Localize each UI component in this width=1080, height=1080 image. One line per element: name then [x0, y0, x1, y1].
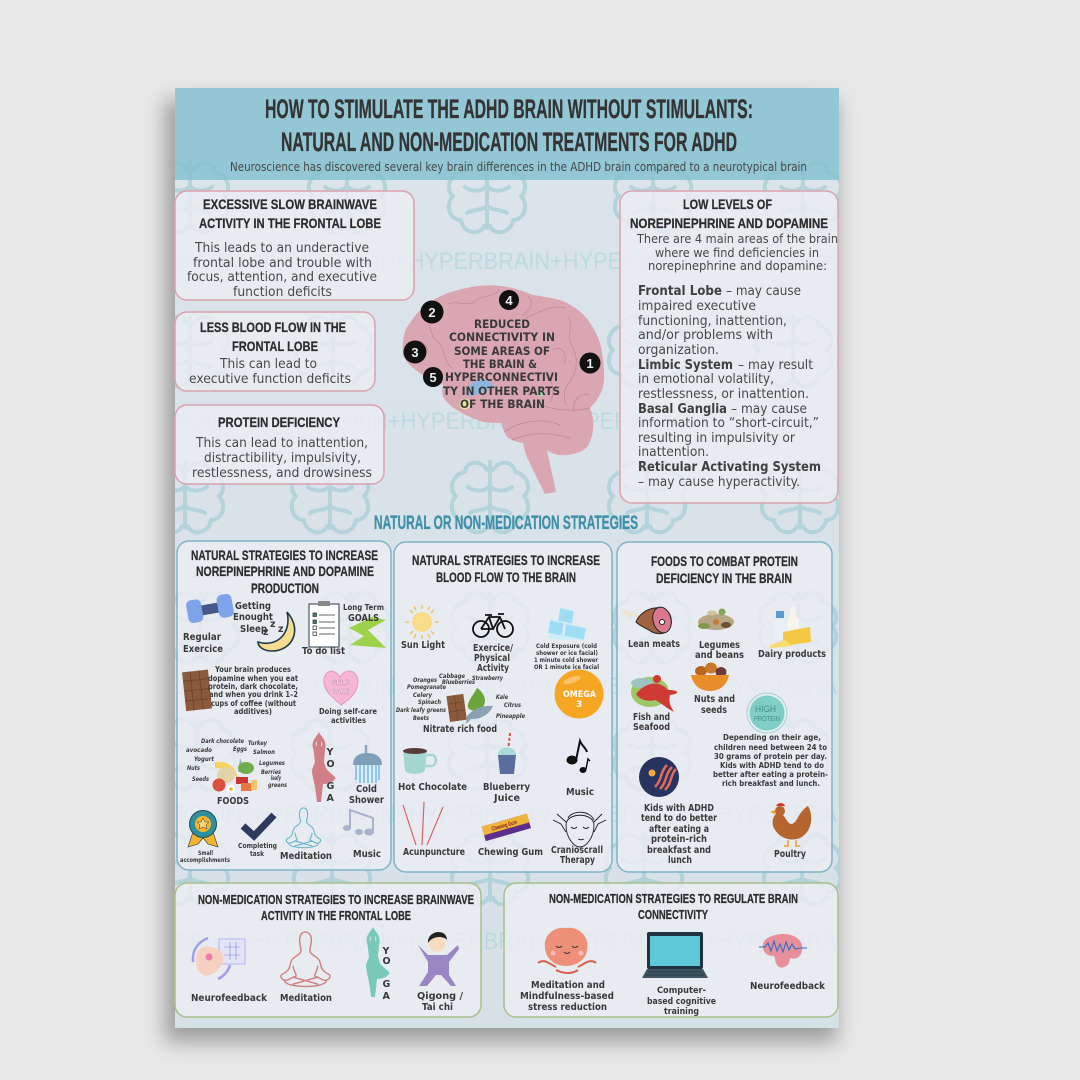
icon: omega 3 capsule: 3 — [576, 700, 582, 710]
food words: Dark chocolate — [201, 738, 244, 745]
text: dopamine note: dopamine when you eat — [208, 674, 298, 683]
brain markers 1-5: 4 — [505, 293, 513, 308]
label: hot chocolate: Hot Chocolate — [398, 782, 467, 793]
icon: green goals mountain — [349, 617, 386, 648]
label: nuts and seeds: seeds — [701, 705, 727, 716]
label: cold shower — [349, 784, 384, 806]
label: blueberry juice: Blueberry — [483, 782, 531, 793]
text: protein note: children need between 24 to — [714, 743, 828, 752]
panel: low levels of norepinephrine and dopamine: Frontal Lobe — [638, 283, 722, 299]
text: dopamine note: and when you drink 1–2 — [209, 690, 298, 699]
nitrate food words: Oranges — [413, 677, 437, 684]
panel: strategies to increase norepinephrine and dopamine: PRODUCTION — [251, 580, 319, 596]
nitrate food words: Blueberries — [442, 679, 475, 686]
label: neurofeedback: Neurofeedback — [750, 981, 826, 992]
label: completing task — [238, 842, 277, 858]
panel: strategies to increase norepinephrine and dopamine: NATURAL STRATEGIES TO INCREASE — [191, 547, 378, 563]
brain centre text: THE BRAIN & — [463, 357, 537, 371]
food words: Eggs — [233, 746, 247, 753]
icon: ham — [624, 605, 674, 635]
food words: avocado — [186, 747, 212, 754]
panel: low levels of norepinephrine and dopamine: NOREPINEPHRINE AND DOPAMINE — [630, 215, 828, 231]
brain centre text: SOME AREAS OF — [454, 344, 550, 358]
label: yoga letters: Y — [382, 946, 390, 957]
text: dopamine note: additives) — [234, 707, 272, 716]
panel: excessive slow brainwave activity: This leads to an underactive — [194, 240, 369, 256]
label: computer-based cognitive training: Computer- — [657, 986, 706, 996]
icon: nuts bowl — [691, 662, 729, 691]
label: neurofeedback: Neurofeedback — [191, 993, 268, 1004]
label: computer-based cognitive training: training — [664, 1007, 699, 1017]
food words: Nuts — [187, 765, 200, 772]
label: legumes and beans: Legumes — [699, 640, 740, 651]
label: small accomplishments — [180, 850, 230, 864]
panel: protein deficiency — [175, 405, 384, 484]
panel: foods to combat protein deficiency: DEFICIENCY IN THE BRAIN — [656, 570, 792, 586]
watermark wordmark rows — [384, 252, 837, 949]
label: legumes and beans: and beans — [695, 650, 744, 661]
watermark wordmark rows: BRAIN+HYPERBRAIN+HYPERBRAIN+HYPERBRAIN+HYPERBRA — [175, 801, 837, 828]
label: computer-based cognitive training: based cognitive — [647, 997, 716, 1007]
panel: low levels of norepinephrine and dopamine: where we find deficiencies in — [655, 245, 819, 260]
panel: less blood flow — [175, 312, 375, 391]
label: yoga letters: A — [382, 991, 390, 1002]
icon: acupuncture needles — [403, 802, 443, 845]
panel: low levels of norepinephrine and dopamine: resulting in impulsivity or — [638, 430, 795, 446]
label: cranioscrall therapy — [551, 845, 603, 866]
panel: strategies to regulate brain connectivity — [504, 883, 838, 1017]
brain centre text: HYPERCONNECTIVI — [445, 370, 558, 384]
label: doing self-care activities: Doing self-care — [319, 707, 377, 716]
label: qigong tai chi — [417, 991, 464, 1013]
panel: low levels of norepinephrine and dopamine: – may cause — [731, 401, 807, 417]
label: cold shower: Cold — [356, 784, 377, 795]
nitrate food words: Strawberry — [472, 675, 504, 682]
label: meditation: Meditation — [280, 851, 332, 862]
watermark wordmark rows: BRAIN+HYPERBRAIN+HYPERBRAIN+HYPERBRAIN+HYPERBRA — [175, 928, 837, 955]
nitrate food words — [396, 673, 525, 722]
panel: less blood flow: LESS BLOOD FLOW IN THE — [200, 319, 346, 335]
icon: dairy products — [770, 607, 811, 648]
panel: low levels of norepinephrine and dopamine: Reticular Activating System — [638, 459, 821, 475]
icon: nitrate foods — [446, 688, 493, 724]
label: getting enought sleep: Getting — [235, 601, 271, 612]
label: long term goals: GOALS — [348, 613, 379, 624]
nitrate food words: Beets — [413, 715, 429, 722]
icon: omega 3 capsule: OMEGA — [563, 690, 596, 700]
text: cold exposure: Cold Exposure (cold — [536, 643, 597, 650]
panel: low levels of norepinephrine and dopamine: impaired executive — [638, 298, 756, 314]
panel: protein deficiency: PROTEIN DEFICIENCY — [218, 414, 341, 430]
icon: laptop — [642, 932, 708, 978]
label: cranioscrall therapy: Cranioscrall — [551, 845, 603, 856]
watermark wordmark rows: BRAIN+HYPERBRAIN+HYPERBRAIN+HYPERBRAIN+HYPERBRA — [175, 248, 837, 275]
text: kids with adhd: lunch — [668, 855, 692, 866]
label: to do list: To do list — [302, 646, 345, 657]
subtitle: Neuroscience has discovered several key brain differences in the ADHD brain compared to a neurotypical brain — [230, 159, 807, 174]
label: fish and seafood — [633, 712, 670, 733]
panel: excessive slow brainwave activity: ACTIVITY IN THE FRONTAL LOBE — [199, 215, 381, 231]
panel: strategies to increase blood flow: NATURAL STRATEGIES TO INCREASE — [412, 552, 600, 568]
panel: low levels of norepinephrine and dopamine: – may cause hyperactivity. — [638, 474, 800, 490]
brain centre text: REDUCED — [474, 317, 530, 331]
label: regular exercice: Exercice — [183, 644, 223, 655]
label: regular exercice — [183, 632, 223, 655]
brain markers 1-5: 5 — [429, 370, 437, 385]
panel: strategies to increase brainwave activity — [175, 883, 481, 1017]
panel: low levels of norepinephrine and dopamine: functioning, inattention, — [638, 313, 787, 329]
icon: cold shower — [353, 745, 382, 783]
nitrate food words: Kale — [496, 694, 508, 701]
panel: foods to combat protein deficiency — [617, 542, 832, 872]
icon: yoga teal — [366, 927, 390, 997]
label: dairy products: Dairy products — [758, 649, 826, 660]
icon: ice cubes — [548, 608, 586, 640]
text: protein note: rich breakfast and lunch. — [722, 779, 820, 788]
icon: seafood plate — [631, 675, 677, 712]
text: protein note: Depending on their age, — [723, 733, 821, 742]
label: completing task: task — [250, 850, 264, 858]
icon: self care heart: CARE — [332, 689, 349, 696]
label: doing self-care activities: activities — [331, 716, 366, 725]
label: computer-based cognitive training — [647, 986, 716, 1017]
label: exercice physical activity: Exercice/ — [473, 643, 513, 654]
panel: less blood flow: executive function deficits — [189, 371, 351, 387]
brain centre text: CONNECTIVITY IN — [449, 330, 555, 344]
section heading: natural or non-medication strategies: NATURAL OR NON-MEDICATION STRATEGIES — [374, 513, 638, 534]
label: legumes and beans — [695, 640, 744, 661]
infographic poster — [153, 88, 849, 1054]
label: completing task: Completing — [238, 842, 277, 850]
label: nuts and seeds: Nuts and — [694, 694, 735, 705]
nitrate food words: Pineapple — [496, 713, 525, 720]
nitrate food words: Citrus — [504, 702, 521, 709]
panel: low levels of norepinephrine and dopamine: Limbic System — [638, 357, 733, 373]
icon: blueberry smoothie — [498, 733, 516, 774]
brain illustration with numbered regions — [403, 285, 604, 494]
label: exercice physical activity: Physical — [474, 653, 510, 664]
label: blueberry juice — [483, 782, 531, 804]
panel: low levels of norepinephrine and dopamine: in emotional volatility, — [638, 371, 774, 387]
panel: low levels of norepinephrine and dopamine: – may cause — [726, 283, 801, 299]
label: lean meats: Lean meats — [628, 639, 680, 650]
icon: meditation red — [281, 932, 330, 986]
panel: low levels of norepinephrine and dopamine: restlessness, or inattention. — [638, 386, 809, 402]
panel: foods to combat protein deficiency: FOODS TO COMBAT PROTEIN — [651, 553, 798, 569]
brain centre text: OF THE BRAIN — [460, 397, 545, 411]
text: cold exposure: 1 minute cold shower — [534, 657, 598, 664]
panel: excessive slow brainwave activity: frontal lobe and trouble with — [193, 255, 372, 271]
icon: self care heart — [324, 671, 358, 705]
icon: sun — [405, 605, 439, 639]
text: protein note: better after eating a protein- — [713, 770, 828, 779]
label: acunpuncture: Acunpuncture — [403, 847, 465, 858]
panel: excessive slow brainwave activity — [175, 191, 414, 300]
label: fish and seafood: Fish and — [633, 712, 670, 723]
icon: moon and sleep: z — [278, 624, 284, 635]
text: cold exposure: OR 1 minute ice facial — [534, 664, 599, 671]
text: dopamine note: protein, dark chocolate, — [208, 682, 298, 691]
label: yoga letters: O — [382, 956, 391, 967]
icon: chewing gum pack: Chewing Gum — [491, 820, 518, 833]
label: qigong tai chi: Qigong / — [417, 991, 464, 1002]
label: yoga letters — [326, 747, 335, 804]
icon: chocolate bar — [182, 670, 212, 711]
label: sun light: Sun Light — [401, 640, 445, 651]
label: cranioscrall therapy: Therapy — [560, 855, 596, 866]
panel: less blood flow: FRONTAL LOBE — [232, 338, 318, 354]
panel: low levels of norepinephrine and dopamine — [620, 191, 838, 503]
panel: excessive slow brainwave activity: EXCESSIVE SLOW BRAINWAVE — [203, 196, 377, 212]
food words: greens — [268, 782, 287, 789]
brain centre text: TY IN OTHER PARTS — [443, 384, 560, 398]
panel: strategies to regulate brain connectivity: CONNECTIVITY — [638, 907, 708, 922]
text: cold exposure: shower or ice facial) — [536, 650, 598, 657]
panel: low levels of norepinephrine and dopamine: There are 4 main areas of the brain — [636, 231, 838, 246]
nitrate food words: Celery — [413, 692, 433, 699]
panel: low levels of norepinephrine and dopamine: LOW LEVELS OF — [683, 196, 772, 212]
label: exercice physical activity — [473, 643, 513, 674]
food words: Legumes — [259, 760, 285, 767]
text: kids with adhd: after eating a — [649, 824, 709, 835]
text: protein note — [713, 733, 828, 788]
panel: less blood flow: This can lead to — [219, 356, 317, 372]
label: yoga letters: G — [326, 781, 334, 792]
icon: hot chocolate cup — [403, 748, 436, 774]
icon: high protein badge — [747, 693, 787, 733]
title: HOW TO STIMULATE THE ADHD BRAIN WITHOUT STIMULANTS: — [265, 94, 753, 124]
label: meditation and mindfulness: stress reduction — [528, 1002, 607, 1013]
panel: low levels of norepinephrine and dopamine: inattention. — [638, 444, 709, 460]
label: meditation and mindfulness: Mindfulness-based — [520, 991, 614, 1002]
panel: excessive slow brainwave activity: function deficits — [233, 284, 332, 300]
watermark pattern — [147, 162, 841, 904]
label: yoga letters: O — [326, 759, 335, 770]
label: doing self-care activities — [319, 707, 377, 725]
icon: moon and sleep — [258, 612, 295, 651]
text: dopamine note: Your brain produces — [214, 665, 291, 674]
icon: check mark — [243, 815, 274, 836]
food words: Seeds — [192, 776, 209, 783]
panel: low levels of norepinephrine and dopamine: organization. — [638, 342, 719, 358]
nitrate food words: Dark leafy greens — [396, 707, 446, 714]
icon: meditation teal — [286, 808, 321, 848]
watermark wordmark rows: BRAIN+HYPERBRAIN+HYPERBRAIN+HYPERBRAIN+HYPERBRA — [167, 408, 829, 435]
label: small accomplishments: Small — [198, 850, 213, 857]
icon: meditating brain character — [538, 928, 596, 973]
panel: protein deficiency: This can lead to inattention, — [195, 435, 368, 451]
text: cold exposure — [534, 643, 599, 671]
panel: low levels of norepinephrine and dopamine: Basal Ganglia — [638, 401, 727, 417]
watermark wordmark rows: BRAIN+HYPERBRAIN+HYPERBRAIN+HYPERBRAIN+HYPERBRA — [175, 673, 837, 700]
icon: egg and bacon plate — [639, 757, 679, 797]
icon: chewing gum pack — [482, 814, 531, 841]
label: poultry: Poultry — [774, 849, 807, 860]
title — [265, 94, 753, 157]
icon: qigong figure — [418, 932, 459, 986]
food words: Berries — [261, 769, 281, 776]
label: yoga letters: G — [382, 979, 390, 990]
panel: strategies to increase brainwave activity: ACTIVITY IN THE FRONTAL LOBE — [261, 908, 411, 923]
label: cold shower: Shower — [349, 795, 384, 806]
icon: bicycle — [473, 614, 513, 637]
label: getting enought sleep: Sleep — [240, 624, 267, 635]
label: long term goals — [343, 603, 384, 624]
panel: low levels of norepinephrine and dopamine: information to “short-circuit,” — [638, 415, 819, 431]
panel: strategies to increase norepinephrine and dopamine: NOREPINEPHRINE AND DOPAMINE — [196, 563, 374, 579]
panel: strategies to regulate brain connectivity: NON-MEDICATION STRATEGIES TO REGULATE BRAIN — [549, 891, 798, 906]
label: foods: FOODS — [217, 796, 249, 807]
panel: low levels of norepinephrine and dopamine: norepinephrine and dopamine: — [648, 258, 827, 273]
icon: brain with brainwave — [759, 934, 807, 968]
brain markers 1-5: 2 — [428, 305, 436, 320]
brain markers 1-5: 1 — [586, 356, 594, 371]
icon: high protein badge: PROTEIN — [754, 716, 780, 723]
label: exercice physical activity: Activity — [477, 663, 510, 674]
text: kids with adhd: Kids with ADHD — [644, 803, 714, 814]
icon: yoga pose — [312, 732, 336, 802]
label: chewing gum: Chewing Gum — [478, 847, 543, 858]
label: nitrate rich food: Nitrate rich food — [423, 724, 497, 735]
brain centre text — [443, 317, 560, 411]
label: getting enought sleep — [233, 601, 273, 635]
icon: moon and sleep: z — [270, 619, 276, 630]
icon: craniosacral face with hands — [553, 812, 606, 847]
nitrate food words: Cabbage — [439, 673, 465, 680]
brain markers 1-5 — [404, 290, 600, 387]
panel: strategies to increase brainwave activity: NON-MEDICATION STRATEGIES TO INCREASE BRAINWAVE — [198, 892, 474, 907]
food words: leafy — [271, 775, 282, 782]
panel: strategies to increase norepinephrine and dopamine — [177, 541, 391, 870]
panel: strategies to increase blood flow — [394, 542, 612, 872]
panel: strategies to increase blood flow: BLOOD FLOW TO THE BRAIN — [436, 569, 576, 585]
text: dopamine note — [208, 665, 298, 716]
food words: Salmon — [253, 749, 275, 756]
icon: omega 3 capsule — [554, 670, 604, 718]
icon: clipboard checklist — [309, 601, 339, 647]
label: meditation and mindfulness — [520, 980, 614, 1013]
label: meditation and mindfulness: Meditation and — [531, 980, 605, 991]
food words — [186, 738, 287, 789]
label: meditation: Meditation — [280, 993, 332, 1004]
icon: moon and sleep: z — [263, 627, 269, 638]
panel: low levels of norepinephrine and dopamine: and/or problems with — [638, 327, 773, 343]
text: kids with adhd: breakfast and — [647, 845, 711, 856]
label: regular exercice: Regular — [183, 632, 221, 643]
title: NATURAL AND NON-MEDICATION TREATMENTS FOR ADHD — [281, 127, 737, 157]
text: dopamine note: cups of coffee (without — [211, 699, 296, 708]
panel: protein deficiency: restlessness, and drowsiness — [192, 465, 372, 481]
icon: high protein badge: HIGH — [755, 704, 776, 714]
icon: chicken — [770, 803, 811, 846]
text: kids with adhd: protein-rich — [651, 834, 707, 845]
label: qigong tai chi: Tai chi — [422, 1002, 453, 1013]
text: kids with adhd — [641, 803, 717, 866]
icon: achievement badge — [188, 810, 218, 847]
label: nuts and seeds — [694, 694, 735, 716]
label: long term goals: Long Term — [343, 603, 384, 612]
icon: food pile — [212, 758, 257, 793]
icon: neurofeedback head — [193, 938, 245, 979]
label: yoga letters: A — [326, 793, 334, 804]
label: small accomplishments: accomplishments — [180, 857, 230, 864]
text: kids with adhd: tend to do better — [641, 813, 717, 824]
panel: low levels of norepinephrine and dopamine: – may result — [738, 357, 813, 373]
nitrate food words: Spinach — [418, 699, 441, 706]
label: fish and seafood: Seafood — [633, 722, 670, 733]
label: music: Music — [353, 849, 381, 860]
icon: music notes pale — [343, 810, 374, 836]
nitrate food words: Pomegranate — [407, 684, 446, 691]
icon: dumbbell — [185, 593, 235, 624]
icon: music note black — [566, 741, 590, 773]
brain markers 1-5: 3 — [411, 345, 419, 360]
panel: excessive slow brainwave activity: focus, attention, and executive — [187, 269, 377, 285]
label: yoga letters: Y — [326, 747, 334, 758]
label: blueberry juice: Juice — [493, 793, 520, 804]
icon: self care heart: SELF — [332, 680, 350, 687]
food words: Yogurt — [194, 756, 215, 763]
label: yoga letters — [382, 946, 391, 1002]
text: protein note: Kids with ADHD tend to do — [720, 761, 825, 770]
text: protein note: 30 grams of protein per day. — [714, 752, 827, 761]
label: music: Music — [566, 787, 594, 798]
panel: protein deficiency: distractibility, impulsivity, — [204, 450, 361, 466]
label: getting enought sleep: Enought — [233, 612, 273, 623]
icon: legumes pile — [698, 608, 734, 630]
food words: Turkey — [248, 740, 268, 747]
